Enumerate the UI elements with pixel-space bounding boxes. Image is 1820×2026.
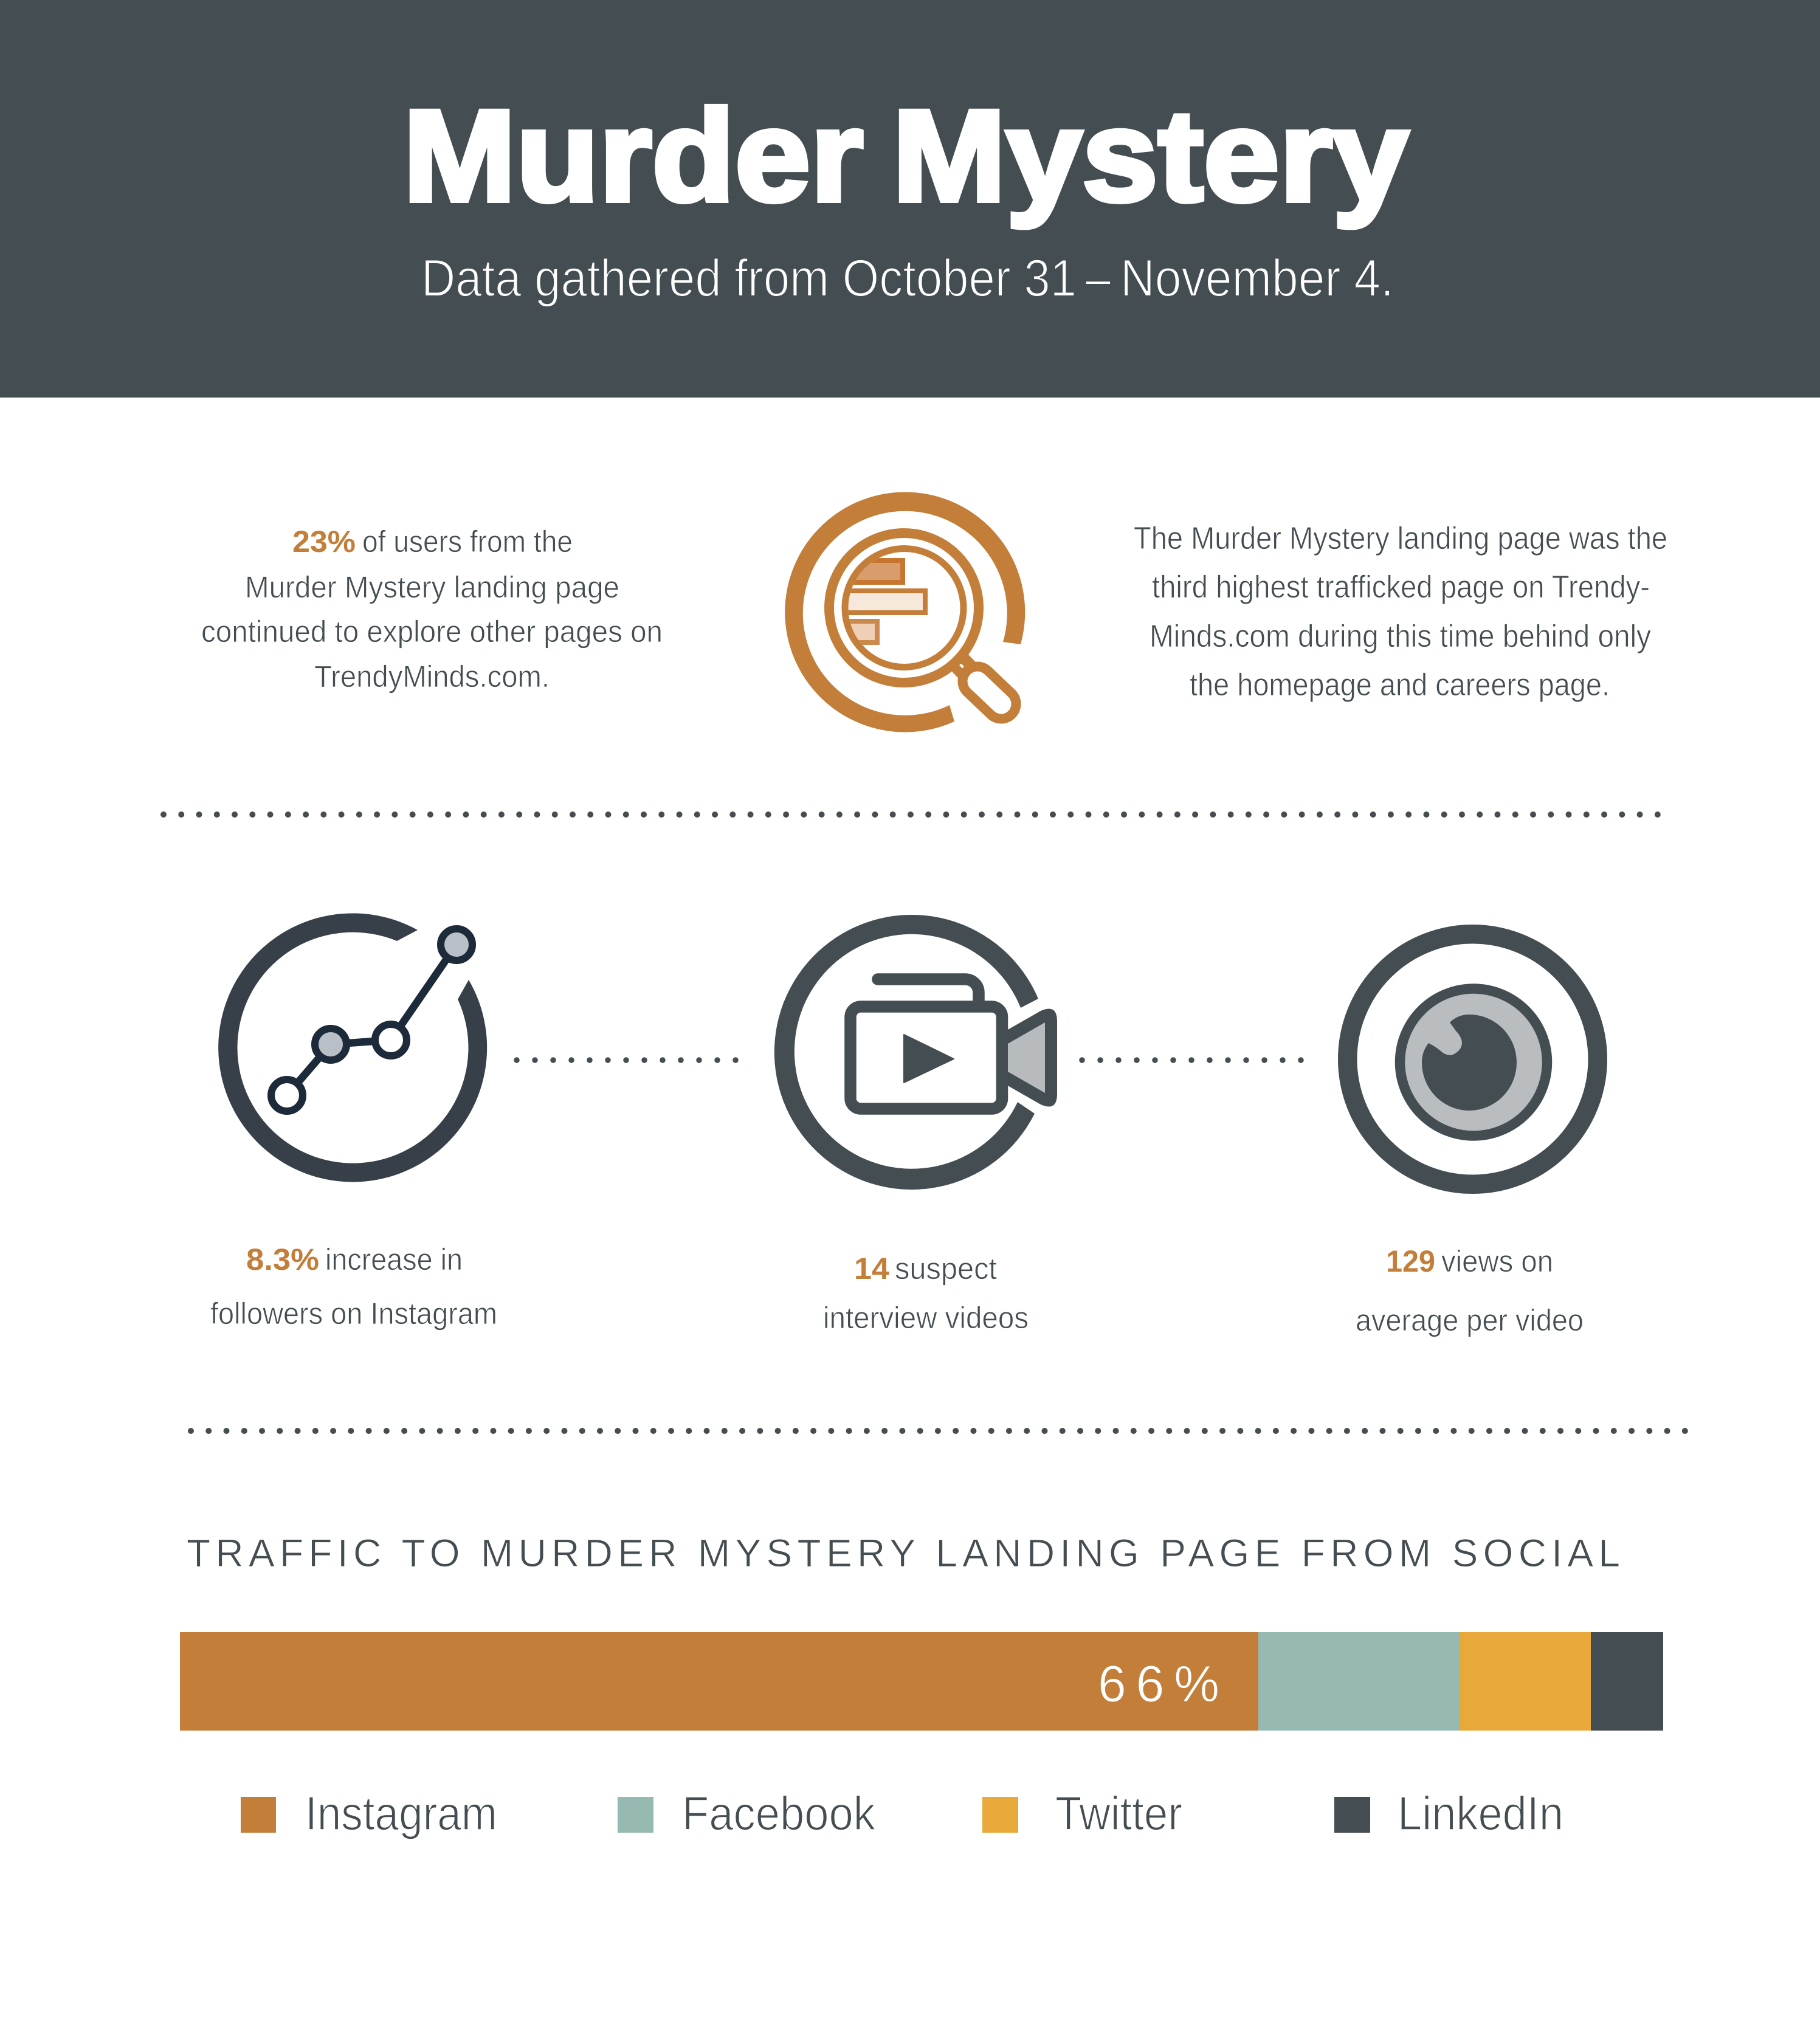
caption: 129 views: average per video [1356,1303,1584,1337]
legend [241,1787,1563,1840]
legend item: Twitter [982,1787,1182,1840]
legend item: Facebook: Facebook [682,1787,876,1840]
text block: 23% of users: TrendyMinds.com. [314,660,550,694]
text block: third highest trafficked page [1134,521,1667,703]
connector dots 1 [517,1057,739,1063]
subtitle: November 4. [1120,249,1394,308]
caption: 14 suspect videos: 14 [854,1252,889,1286]
caption: 8.3% increase: 8.3% [246,1242,319,1277]
text block: 23% of users: continued to explore other pages on [201,615,663,649]
icon: eye [1348,934,1598,1184]
caption: 129 views: 129 [1386,1244,1435,1278]
bar label: 66%: 66% [1098,1655,1219,1712]
caption: 14 suspect videos: interview videos [823,1301,1029,1335]
panel: header [0,0,1820,398]
caption: 8.3% increase: followers on Instagram [210,1297,497,1331]
caption: 129 views [1356,1244,1584,1337]
divider [164,811,1664,818]
caption: 14 suspect videos [823,1252,1029,1335]
connector dots 2 [1082,1057,1305,1063]
caption: 8.3% increase [210,1242,497,1331]
icon: video camera [774,915,1057,1190]
icon: magnifier over bar chart [785,492,1025,732]
legend item: LinkedIn [1334,1787,1563,1840]
text block: third highest trafficked page: Minds.com during this time behind only [1150,619,1651,654]
text block: third highest trafficked page: third highest trafficked page on Trendy- [1152,570,1650,605]
text block: 23% of users: 23% [292,525,356,559]
divider [191,1428,1687,1434]
stacked bar chart [180,1632,1663,1731]
title: Murder [403,83,863,229]
legend item: LinkedIn: LinkedIn [1398,1787,1563,1840]
legend item: Instagram [241,1787,497,1840]
caption: 129 views: views on [1441,1244,1553,1278]
legend item: Instagram: Instagram [305,1787,497,1840]
icon: line chart [218,913,487,1182]
caption: 14 suspect videos: suspect [895,1252,997,1286]
heading: traffic: TRAFFIC TO MURDER MYSTERY LANDING PAGE FROM SOCIAL [187,1531,1620,1575]
text block: third highest trafficked page: the homepage and careers page. [1190,667,1610,703]
legend item: Twitter: Twitter [1055,1787,1182,1840]
caption: 8.3% increase: increase in [325,1242,463,1277]
subtitle: – [1086,249,1111,308]
subtitle: Data gathered from October 31 [421,249,1077,308]
text block: 23% of users [201,525,663,694]
text block: 23% of users: Murder Mystery landing page [245,570,619,604]
title [403,83,1408,229]
text block: 23% of users: of users from the [362,525,573,559]
text block: third highest trafficked page: The Murder Mystery landing page was the [1134,521,1667,556]
title: Mystery [892,83,1408,229]
